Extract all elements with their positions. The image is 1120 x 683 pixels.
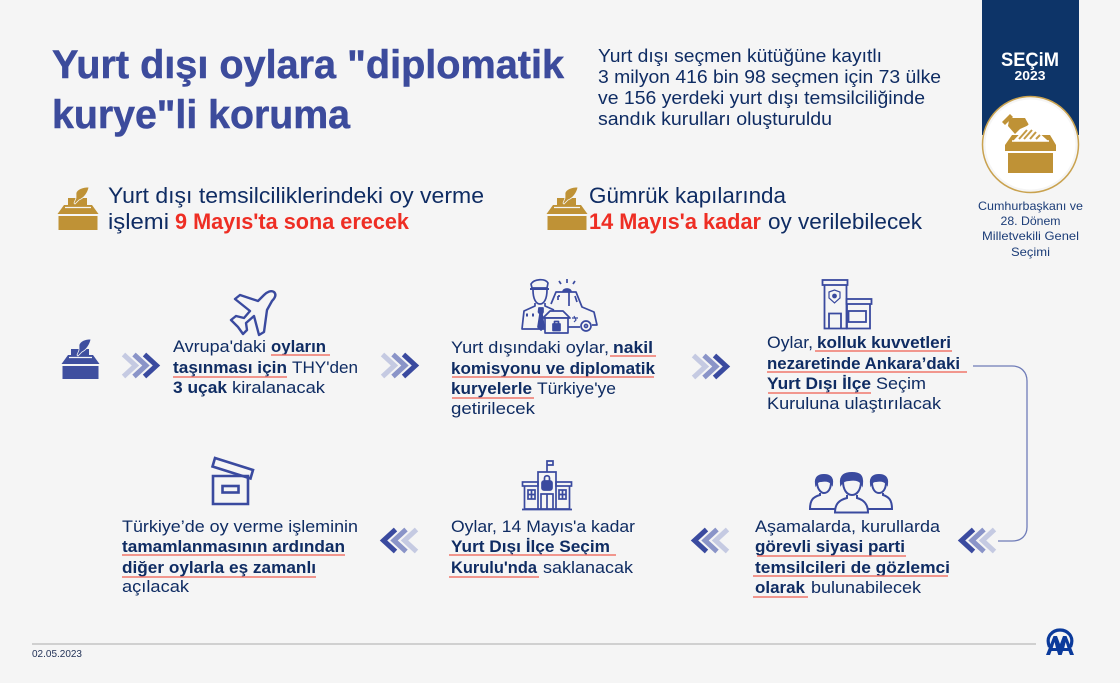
step text: Kurulu'nda bbox=[451, 558, 538, 577]
step text: görevli siyasi parti bbox=[755, 537, 905, 556]
arrow: right chevrons 1 bbox=[124, 354, 156, 376]
step text: Avrupa'daki bbox=[173, 337, 266, 356]
step text: temsilcileri de gözlemci bbox=[755, 558, 950, 577]
step text: taşınması için bbox=[173, 358, 287, 377]
deadline text: 9 Mayıs'ta sona erecek bbox=[175, 209, 410, 234]
step text: nezaretinde Ankara’daki bbox=[767, 354, 960, 373]
panel: step 5 storage bbox=[449, 461, 635, 577]
badge title: SEÇiM bbox=[1001, 50, 1059, 71]
step text: kuryelerle bbox=[451, 379, 532, 398]
panel: step 3 police escort bbox=[767, 280, 967, 413]
panel: consulate voting deadline bbox=[58, 183, 484, 234]
step text: kiralanacak bbox=[232, 378, 326, 397]
step text: diğer oylarla eş zamanlı bbox=[122, 558, 316, 577]
icon: election board building bbox=[522, 461, 572, 510]
step text: Türkiye'ye bbox=[537, 379, 616, 398]
panel: election badge bbox=[978, 0, 1083, 259]
panel: step 4 observers bbox=[753, 473, 950, 597]
icon: gold ballot box bbox=[546, 187, 588, 230]
step text: tamamlanmasının ardından bbox=[122, 537, 345, 556]
deadline text: Gümrük kapılarında bbox=[589, 183, 787, 208]
icon: three people bbox=[810, 473, 892, 512]
title: kurye"li koruma bbox=[52, 93, 351, 137]
step text bbox=[451, 338, 656, 418]
step text: 3 uçak bbox=[173, 378, 228, 397]
step text: Seçim bbox=[876, 374, 926, 393]
title: Yurt dışı oylara "diplomatik bbox=[52, 43, 565, 87]
badge title bbox=[1001, 50, 1059, 83]
step text: açılacak bbox=[122, 577, 190, 596]
footer date: 02.05.2023 bbox=[32, 648, 82, 660]
step text: Oylar, 14 Mayıs'a kadar bbox=[451, 517, 635, 536]
deadline text: Yurt dışı temsilciliklerindeki oy verme bbox=[108, 183, 484, 208]
step text bbox=[753, 517, 950, 597]
deadline text: 14 Mayıs'a kadar bbox=[589, 209, 761, 234]
icon: police station bbox=[822, 280, 872, 328]
badge caption bbox=[978, 199, 1083, 259]
step text bbox=[449, 517, 635, 577]
badge caption: 28. Dönem bbox=[1000, 214, 1060, 228]
badge caption: Seçimi bbox=[1011, 245, 1050, 259]
step text: Kuruluna ulaştırılacak bbox=[767, 394, 942, 413]
arrow: left chevrons 2 bbox=[694, 530, 728, 552]
step text: Yurt Dışı İlçe Seçim bbox=[451, 537, 610, 556]
step text: saklanacak bbox=[543, 558, 634, 577]
arrow: connector from step 3 to step 4 bbox=[973, 366, 1027, 541]
deadline text: oy verilebilecek bbox=[768, 209, 923, 234]
icon: blue ballot box bbox=[62, 339, 100, 379]
panel: customs voting deadline bbox=[546, 183, 923, 234]
deadline text bbox=[108, 183, 484, 234]
intro text block bbox=[598, 46, 941, 129]
step text: Yurt Dışı İlçe bbox=[767, 374, 871, 393]
arrow: left chevrons 1 bbox=[962, 530, 994, 552]
arrow: right chevrons 3 bbox=[694, 356, 726, 378]
step text bbox=[767, 333, 967, 413]
badge caption: Cumhurbaşkanı ve bbox=[978, 199, 1083, 213]
intro text block: ve 156 yerdeki yurt dışı temsilciliğinde bbox=[598, 88, 925, 108]
icon: officer, car and sealed box bbox=[522, 279, 597, 333]
step text: Aşamalarda, kurullarda bbox=[755, 517, 941, 536]
step text: Türkiye’de oy verme işleminin bbox=[122, 517, 358, 536]
step text: nakil bbox=[613, 338, 653, 357]
step text: getirilecek bbox=[451, 399, 536, 418]
step text: oyların bbox=[271, 337, 326, 356]
deadline text: işlemi bbox=[108, 209, 169, 234]
deadline text bbox=[589, 183, 923, 234]
intro text block: 3 milyon 416 bin 98 seçmen için 73 ülke bbox=[598, 67, 941, 87]
icon: AA logo bbox=[1046, 630, 1074, 655]
icon: open box bbox=[212, 458, 253, 504]
step text: kolluk kuvvetleri bbox=[817, 333, 951, 352]
banner bbox=[982, 0, 1079, 135]
step text: olarak bbox=[755, 578, 806, 597]
step text: Yurt dışındaki oylar, bbox=[451, 338, 609, 357]
panel: step 1 planes bbox=[173, 291, 358, 397]
icon: plane bbox=[231, 291, 275, 335]
step text: Oylar, bbox=[767, 333, 813, 352]
panel: step 2 couriers bbox=[451, 279, 656, 418]
arrow: left chevrons 3 bbox=[384, 530, 416, 552]
icon: gold ballot box in circle bbox=[982, 96, 1078, 192]
badge title: 2023 bbox=[1014, 68, 1046, 83]
step text bbox=[173, 337, 358, 397]
step text bbox=[122, 517, 358, 596]
badge caption: Milletvekili Genel bbox=[982, 229, 1079, 243]
step text: bulunabilecek bbox=[811, 578, 922, 597]
arrow: right chevrons 2 bbox=[382, 354, 416, 376]
intro text block: sandık kurulları oluşturuldu bbox=[598, 109, 832, 129]
title bbox=[52, 43, 565, 137]
step text: THY'den bbox=[292, 358, 358, 377]
step text: komisyonu ve diplomatik bbox=[451, 359, 656, 378]
intro text block: Yurt dışı seçmen kütüğüne kayıtlı bbox=[598, 46, 882, 66]
panel: step 6 opening bbox=[122, 458, 358, 596]
icon: gold ballot box bbox=[58, 187, 98, 230]
